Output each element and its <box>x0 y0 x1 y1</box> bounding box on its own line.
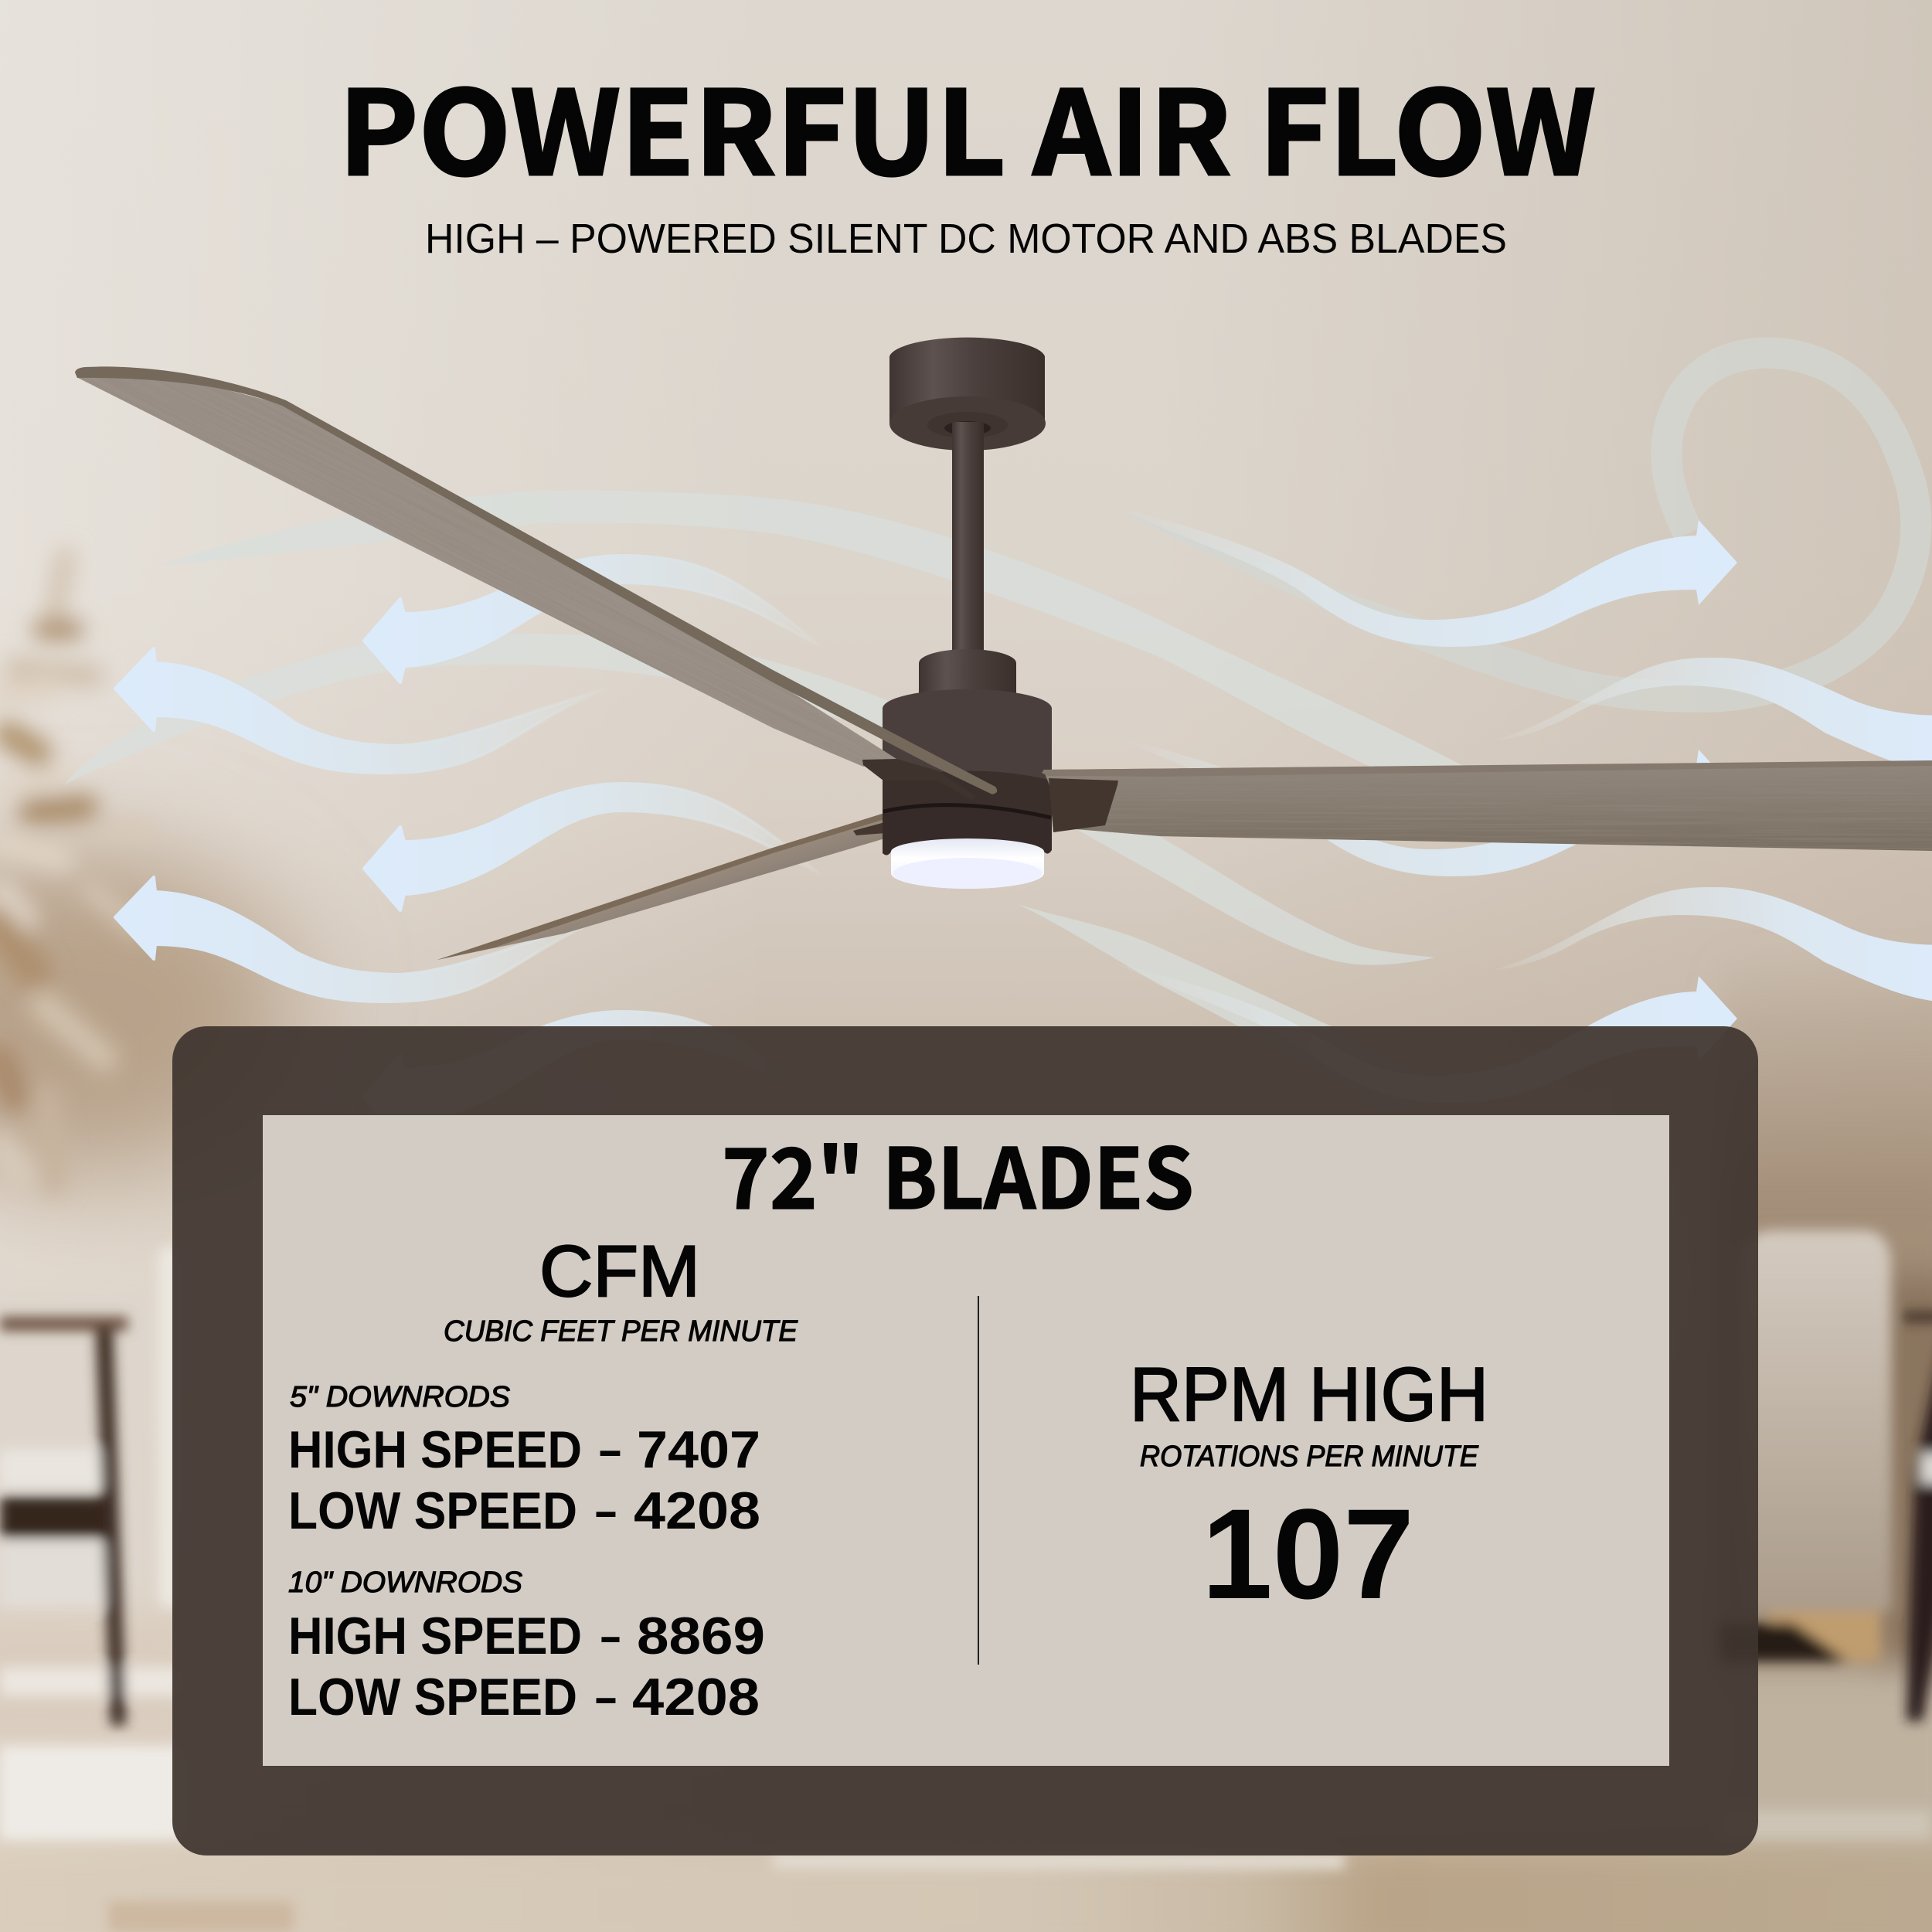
arrow: upper right <box>1109 505 1737 647</box>
RPM caption: ROTATIONS PER MINUTE <box>1140 1440 1479 1473</box>
10 inch high speed: 8869 <box>637 1607 765 1665</box>
panel heading: 72" BLADES <box>722 1113 1194 1233</box>
spec panel: light inner card <box>263 1115 1669 1766</box>
lamp bottom face <box>893 858 1042 889</box>
CFM column <box>288 1230 798 1726</box>
air flow arrows pointing left <box>115 556 819 1138</box>
arrow: behind panel left <box>364 1012 819 1138</box>
motor mid band <box>883 771 1052 818</box>
fan blade: upper left <box>75 366 997 794</box>
arrow: lower far left <box>115 877 606 1002</box>
10 inch high speed: – <box>600 1607 621 1665</box>
arrow: middle right, behind blade <box>1109 735 1737 876</box>
5 inch low speed: – <box>595 1481 617 1540</box>
RPM heading: RPM HIGH <box>1130 1352 1488 1437</box>
arrow: upper mid left <box>364 556 819 682</box>
5 inch downrod label: 5" DOWNRODS <box>290 1381 510 1413</box>
motor housing <box>883 689 1052 811</box>
5 inch low speed: 4208 <box>634 1481 760 1540</box>
warm shadow on left wall <box>0 850 294 1175</box>
ceiling canopy <box>889 338 1046 451</box>
10 inch low speed: – <box>595 1668 617 1726</box>
title: POWERFUL AIR FLOW <box>338 41 1596 209</box>
arrow: lower mid left <box>364 784 819 910</box>
column divider <box>978 1296 979 1665</box>
RPM column <box>1130 1352 1488 1626</box>
pale swirl: middle sweep <box>64 633 1435 965</box>
room walls and floor bands (soft blur) <box>0 951 1932 1932</box>
fan blade: lower left <box>437 813 885 960</box>
5 inch low speed: LOW SPEED <box>288 1481 577 1540</box>
ribbon: right edge upper <box>1495 658 1932 773</box>
pale swirl: top sweep <box>158 491 1476 773</box>
ribbon: right edge lower <box>1495 887 1932 1002</box>
5 inch high speed: HIGH SPEED <box>288 1420 582 1479</box>
10 inch low speed: 4208 <box>632 1668 760 1726</box>
downrod <box>952 422 984 651</box>
5 inch high speed: 7407 <box>637 1420 760 1479</box>
10 inch low speed: LOW SPEED <box>288 1668 577 1726</box>
CFM heading: CFM <box>539 1230 700 1311</box>
arrow: upper far left <box>115 648 606 773</box>
RPM value: 107 <box>1202 1483 1414 1626</box>
motor lower ring <box>883 804 1052 855</box>
motor collar <box>919 649 1016 699</box>
air ribbons running off the right edge <box>1495 658 1932 1002</box>
LED light <box>891 838 1044 889</box>
right armchair (blurred) <box>108 1230 1932 1932</box>
10 inch high speed: HIGH SPEED <box>288 1607 582 1665</box>
fan blade: right <box>1042 760 1932 854</box>
left chair (blurred) <box>0 1246 185 1840</box>
pale swirl: lower sweep <box>1018 904 1468 1113</box>
motor seam <box>883 805 1051 818</box>
pale air swirls behind fan <box>64 491 1476 1113</box>
ceiling fan <box>73 296 1932 960</box>
10 inch downrod label: 10" DOWNRODS <box>288 1566 522 1599</box>
subtitle: HIGH – POWERED SILENT DC MOTOR AND ABS BLADES <box>425 216 1507 262</box>
5 inch high speed: – <box>599 1420 621 1479</box>
air flow arrows pointing right <box>1109 505 1737 1103</box>
pampas grass (blurred) <box>0 556 147 1182</box>
spec panel: dark translucent frame <box>172 1026 1758 1855</box>
CFM caption: CUBIC FEET PER MINUTE <box>444 1315 798 1348</box>
arrow: lower right, behind panel <box>1109 961 1737 1103</box>
pale air loop at right <box>1109 353 1916 697</box>
